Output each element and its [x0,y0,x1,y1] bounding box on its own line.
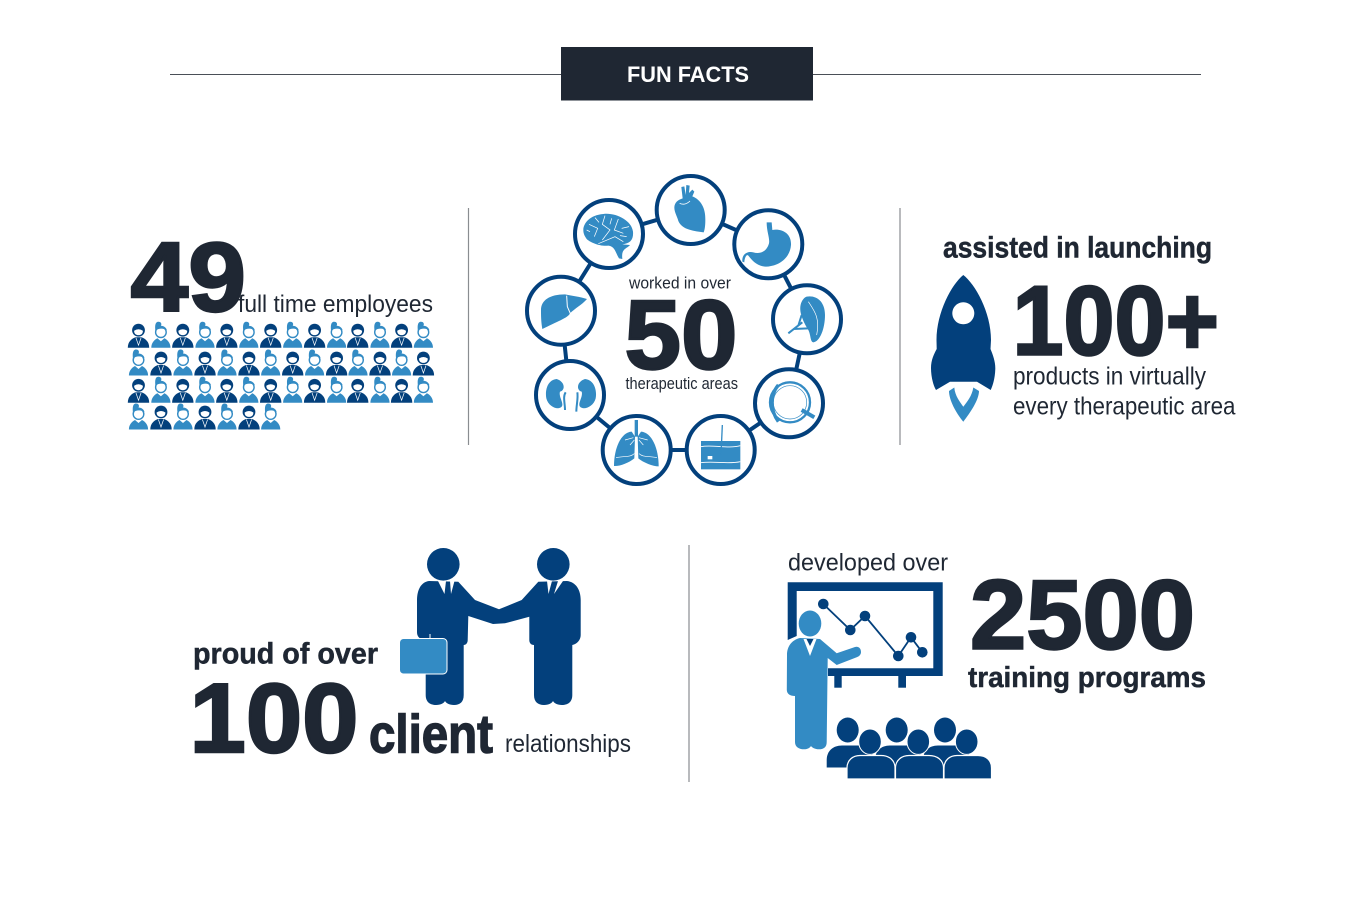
icon: heart [674,185,705,232]
text: client: client [369,704,493,764]
icon: audience [827,718,992,779]
ring circles [527,176,841,484]
text: products in virtually every therapeutic area [1013,362,1236,420]
icon: skin section [701,425,740,469]
text: worked in over: worked in over [628,274,731,292]
number 100: 100 [190,663,358,773]
icon: presenter [787,610,861,749]
header rule [170,74,1201,76]
icon: handshake [400,548,581,705]
icon: rocket [931,275,995,422]
icon: spleen [788,296,825,342]
text: relationships: relationships [505,730,631,758]
number 49: 49 [130,222,246,332]
organ icons [541,185,825,469]
icon: liver [541,294,587,329]
number 2500: 2500 [970,560,1195,670]
icon: eye [770,382,814,422]
text: developed over: developed over [788,550,948,576]
panel: training programs [787,550,1206,779]
people pictogram: 49 people [128,322,434,430]
number 50: 50 [624,280,738,390]
panel: therapeutic areas ring [527,176,841,484]
icon: kidneys [546,379,596,412]
text: therapeutic areas: therapeutic areas [626,375,738,393]
ring connector [561,210,807,450]
text: products in virtually every therapeutic area: every therapeutic area [1013,392,1236,420]
icon: brain [583,214,633,259]
panel: employees [128,222,434,430]
title banner: FUN FACTS [627,62,749,87]
number 100+: 100+ [1012,266,1219,376]
heading: assisted in launching: assisted in launching [943,232,1212,264]
text: products in virtually every therapeutic area: products in virtually [1013,362,1206,390]
caption: full time employees: full time employees [238,291,433,318]
icon: lungs [614,420,659,466]
icon: stomach [742,222,791,267]
text: training programs: training programs [968,662,1206,694]
heading: proud of over: proud of over [193,638,378,670]
icon: presentation board with chart [788,582,943,688]
panel: client relationships [190,548,631,773]
title banner [561,47,813,100]
panel: product launches [931,232,1236,422]
